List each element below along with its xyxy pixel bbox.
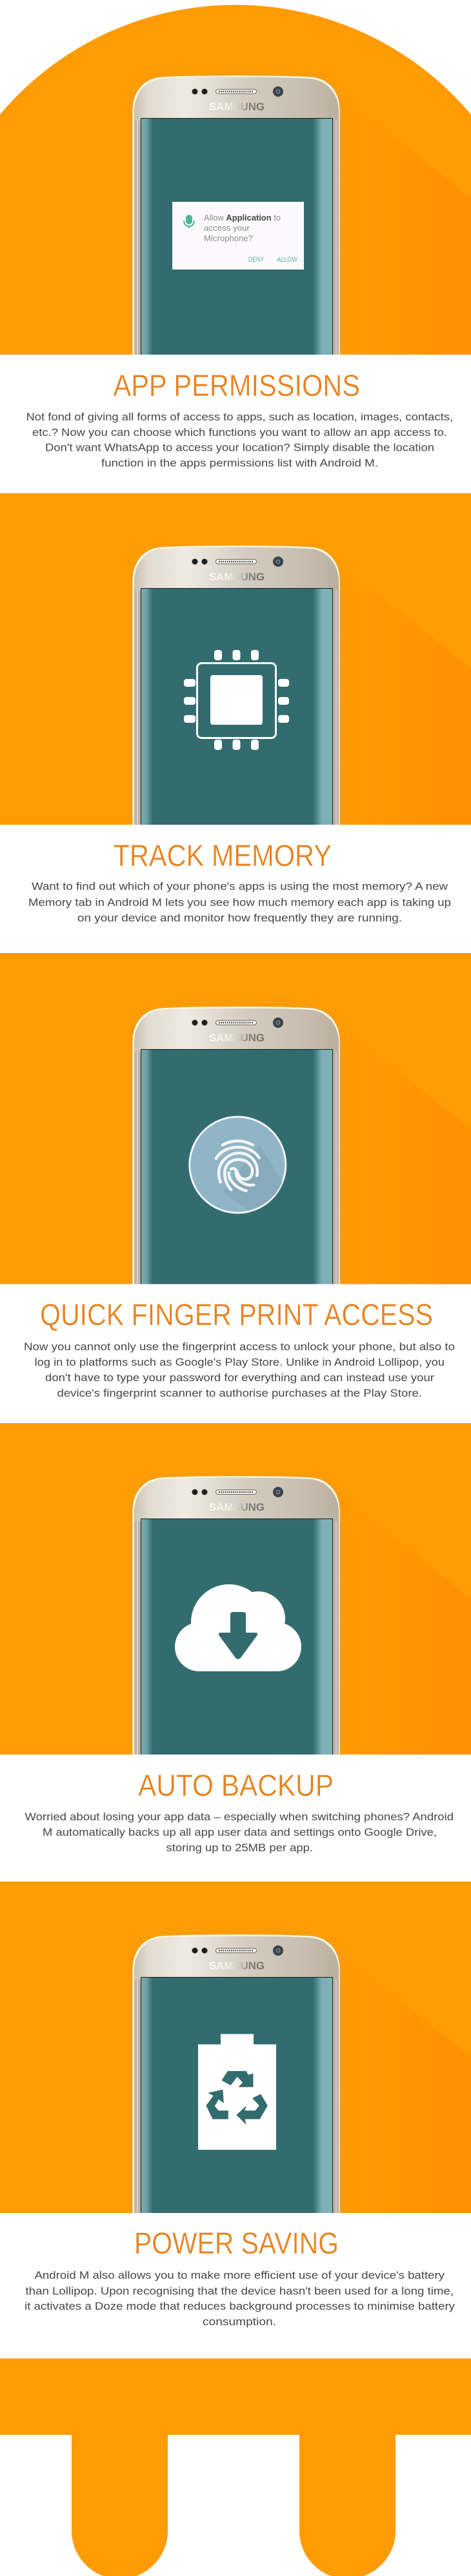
phone brand: SAMSUNG [209, 1501, 265, 1513]
body text: than Lollipop. Upon recognising that the device hasn't been used for a long time, [26, 2285, 454, 2297]
heading: APP PERMISSIONS [114, 368, 360, 402]
body text: etc.? Now you can choose which functions you want to allow an app access to. [32, 426, 447, 438]
body text [26, 411, 453, 469]
phone 1 [132, 75, 471, 355]
permission dialog [172, 202, 304, 270]
icon: memory chip [184, 650, 289, 750]
phone 2 [132, 546, 471, 825]
body text: Not fond of giving all forms of access to apps, such as location, images, contacts, [26, 411, 453, 423]
body text: on your device and monitor how frequently they are running. [77, 912, 402, 924]
deny button: DENY [248, 256, 265, 264]
panel: app permissions [0, 355, 471, 493]
body text: Android M also allows you to make more efficient use of your device's battery [35, 2269, 445, 2281]
body text: Worried about losing your app data – especially when switching phones? Android [25, 1811, 454, 1823]
section 2 background [0, 493, 471, 825]
fingerprint ridges [216, 1141, 259, 1191]
phone brand: SAMSUNG [209, 571, 265, 583]
body text: M automatically backs up all app user data and settings onto Google Drive, [43, 1826, 437, 1838]
allow button: ALLOW [277, 256, 298, 264]
body text: Now you cannot only use the fingerprint access to unlock your phone, but also to [24, 1341, 455, 1353]
body text: storing up to 25MB per app. [166, 1842, 313, 1854]
body text: it activates a Doze mode that reduces background processes to minimise battery [25, 2300, 456, 2312]
body text: Memory tab in Android M lets you see how much memory each app is taking up [28, 896, 451, 909]
icon: fingerprint button [190, 1117, 286, 1213]
phone brand: SAMSUNG [209, 1032, 265, 1044]
phone brand: SAMSUNG [209, 1960, 265, 1972]
download arrow [219, 1612, 257, 1659]
section 4 background [0, 1423, 471, 1755]
body text: Don't want WhatsApp to access your location? Simply disable the location [45, 441, 434, 454]
heading: TRACK MEMORY [114, 838, 332, 872]
panel: quick finger print access [0, 1284, 471, 1423]
body text [25, 1811, 454, 1854]
footer: orange band with two legs [0, 2359, 471, 2576]
dialog message: Allow Application to [204, 213, 281, 222]
phone 5 [132, 1934, 471, 2214]
section 5 background [0, 1882, 471, 2214]
icon: recycling battery [198, 2034, 276, 2150]
body text: don't have to type your password for everything and can instead use your [45, 1372, 434, 1384]
body text: consumption. [203, 2315, 276, 2328]
panel: power saving [0, 2213, 471, 2359]
body text: device's fingerprint scanner to authorise purchases at the Play Store. [57, 1387, 422, 1399]
body text: function in the apps permissions list with Android M. [101, 457, 378, 469]
body text [25, 2269, 456, 2328]
permission dialog: Microphone? [204, 233, 253, 243]
body text [24, 1341, 455, 1399]
section 1 background: orange dome [0, 5, 471, 355]
recycle arrows [206, 2071, 268, 2125]
panel: track memory [0, 825, 471, 953]
body text: Want to find out which of your phone's apps is using the most memory? A new [32, 880, 448, 892]
body text [28, 880, 451, 924]
heading: POWER SAVING [134, 2226, 339, 2260]
icon: cloud download [175, 1584, 301, 1671]
permission dialog: access your [204, 223, 250, 233]
heading: AUTO BACKUP [138, 1768, 334, 1802]
phone brand: SAMSUNG [209, 101, 265, 113]
phone 4 [132, 1476, 471, 1756]
phone 3 [132, 1007, 471, 1286]
section 3 background [0, 953, 471, 1284]
icon: microphone [184, 215, 194, 228]
body text: log in to platforms such as Google's Play Store. Unlike in Android Lollipop, you [35, 1356, 445, 1368]
panel: auto backup [0, 1755, 471, 1882]
